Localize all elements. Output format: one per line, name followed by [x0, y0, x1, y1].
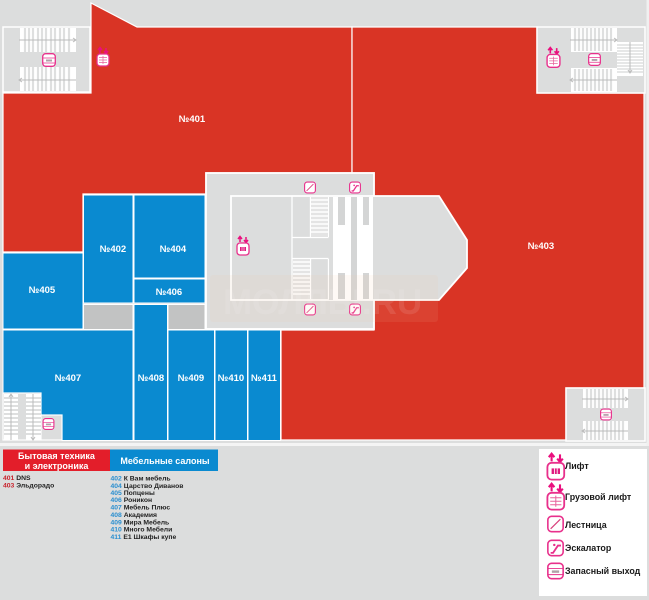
- store 410: [215, 330, 248, 440]
- icon: emergency exit: [43, 54, 55, 66]
- store 411: №411: [251, 373, 278, 384]
- store 407: [3, 330, 133, 440]
- grey unit left: [84, 304, 133, 330]
- legend header: appliances: [3, 450, 110, 471]
- store list: appliances: 403 Эльдорадо: [3, 482, 54, 490]
- store list: furniture: 409 Мира Мебель: [110, 518, 169, 526]
- legend item: lift: Лифт: [565, 461, 589, 471]
- store 406: [134, 279, 205, 303]
- bottom-left stairwell: [3, 393, 62, 440]
- store list: furniture: 406 Роникон: [110, 497, 152, 504]
- store 402: [84, 195, 133, 303]
- store list: furniture: 407 Мебель Плюс: [110, 504, 170, 512]
- legend item: stairs: [548, 516, 607, 532]
- legend header: appliances: Бытовая техника: [18, 451, 96, 461]
- legend item: freight lift: Грузовой лифт: [565, 492, 632, 502]
- icon: passenger lift: [237, 236, 249, 255]
- legend item: stairs: Лестница: [565, 520, 607, 530]
- legend item: emergency exit: [548, 563, 641, 579]
- grey unit right: [168, 304, 205, 330]
- legend item: escalator: [548, 540, 612, 556]
- store 411: [248, 330, 280, 440]
- store 401: №401: [179, 114, 206, 125]
- icon: stairs top: [305, 182, 315, 193]
- store 409: №409: [178, 373, 204, 384]
- top-left stairwell: [3, 27, 90, 92]
- legend item: emergency exit: Запасный выход: [565, 566, 641, 576]
- store list: furniture: 405 Попцены: [110, 490, 155, 497]
- icon: emergency exit: [43, 419, 54, 429]
- icon: emergency exit: [601, 409, 611, 420]
- store 404: №404: [160, 244, 187, 255]
- bottom-right stairwell: [566, 388, 645, 441]
- icon: freight lift top-right: [547, 48, 560, 67]
- store 401: [3, 3, 352, 252]
- legend item: lift: [547, 454, 589, 480]
- top-right stairwell: [537, 27, 645, 93]
- store list: furniture: 402 К Вам мебель: [110, 474, 171, 482]
- store 409: [168, 330, 214, 440]
- store 406: №406: [156, 287, 182, 298]
- icon: escalator top: [350, 182, 360, 193]
- icon: emergency exit: [589, 54, 600, 65]
- store 407: №407: [55, 373, 81, 384]
- store list: furniture: 410 Много Мебели: [110, 526, 172, 534]
- icon: stairs bottom: [305, 304, 315, 315]
- store 403: №403: [528, 241, 554, 252]
- legend item: freight lift: [547, 484, 632, 510]
- icon: escalator bottom: [350, 304, 360, 315]
- store list: appliances: [3, 475, 54, 490]
- legend header: furniture: [110, 450, 218, 471]
- store 408: №408: [138, 373, 164, 384]
- central core: [206, 173, 467, 329]
- store list: furniture: 408 Академия: [110, 512, 157, 519]
- legend panel: [539, 449, 647, 596]
- store 405: №405: [29, 285, 56, 296]
- store 408: [134, 304, 168, 440]
- store list: furniture: [110, 474, 183, 541]
- store list: furniture: 404 Царство Диванов: [110, 483, 183, 490]
- legend header: appliances: и электроника: [25, 461, 89, 471]
- store 410: №410: [218, 373, 244, 384]
- legend header: furniture: Мебельные салоны: [120, 456, 210, 466]
- store 404: [134, 195, 205, 278]
- watermark: МОЛЛЫ.RU: [223, 283, 422, 322]
- store 402: №402: [100, 244, 126, 255]
- store 405: [3, 253, 83, 329]
- icon: freight lift top-left: [97, 48, 109, 66]
- store list: furniture: 411 Е1 Шкафы купе: [110, 534, 176, 541]
- store list: appliances: 401 DNS: [3, 475, 31, 482]
- legend item: escalator: Эскалатор: [565, 543, 612, 553]
